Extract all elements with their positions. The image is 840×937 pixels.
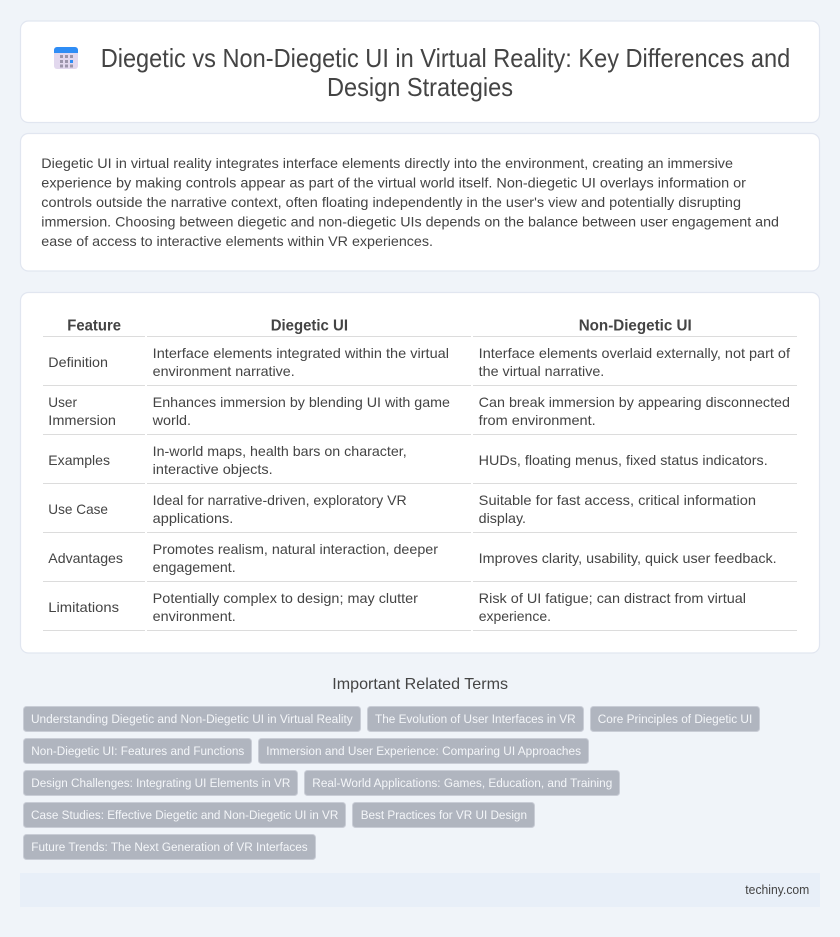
row: use case: display. — [479, 510, 526, 526]
row: examples: HUDs, floating menus, fixed status indicators. — [479, 452, 768, 468]
tag — [24, 802, 346, 828]
tag: Non-Diegetic UI: Features and Functions — [31, 744, 244, 758]
tag — [258, 738, 588, 764]
tag — [24, 738, 252, 764]
row: user immersion: world. — [152, 412, 191, 428]
row: user immersion: from environment. — [479, 412, 596, 428]
row: limitations — [48, 590, 746, 624]
tag: Understanding Diegetic and Non-Diegetic UI in Virtual Reality — [31, 712, 353, 726]
table header: Feature — [67, 318, 121, 335]
panel: introduction — [20, 134, 820, 271]
header panel — [20, 21, 820, 122]
row: definition: Interface elements overlaid externally, not part of — [479, 345, 790, 361]
tag: Immersion and User Experience: Comparing UI Approaches — [266, 744, 581, 758]
intro text block: experience by making controls appear as part of the virtual world itself. Non-diegetic UI overlays information or — [41, 174, 746, 190]
row: use case: Suitable for fast access, critical information — [479, 492, 756, 508]
title: Design Strategies — [327, 74, 513, 102]
title — [101, 45, 790, 102]
row: definition: Interface elements integrated within the virtual — [153, 345, 449, 361]
tag: The Evolution of User Interfaces in VR — [375, 712, 576, 726]
table header: Non-Diegetic UI — [579, 318, 692, 335]
row: use case: applications. — [153, 510, 233, 526]
row: limitations: Potentially complex to design; may clutter — [153, 590, 418, 606]
row: user immersion: Enhances immersion by blending UI with game — [153, 394, 450, 410]
footer site name: techiny.com — [745, 883, 809, 897]
row: limitations: experience. — [479, 608, 551, 624]
tag — [24, 706, 360, 732]
row: advantages: Promotes realism, natural interaction, deeper — [153, 541, 438, 557]
intro text block: Diegetic UI in virtual reality integrates interface elements directly into the environment, creating an immersive — [41, 155, 733, 171]
row: advantages: Improves clarity, usability, quick user feedback. — [479, 550, 777, 566]
row: use case: Ideal for narrative-driven, exploratory VR — [153, 492, 407, 508]
row: examples — [48, 443, 768, 477]
icon: calendar grid — [54, 47, 78, 69]
row: limitations: environment. — [153, 608, 236, 624]
row: limitations: Risk of UI fatigue; can distract from virtual — [479, 590, 746, 606]
tag: Best Practices for VR UI Design — [361, 808, 527, 822]
row: use case — [48, 492, 756, 526]
intro text block — [41, 155, 779, 249]
intro text block: immersion. Choosing between diegetic and non-diegetic UIs depends on the balance between user engagement and — [41, 214, 779, 230]
row: examples: In-world maps, health bars on character, — [153, 443, 407, 459]
tag — [368, 706, 584, 732]
row: advantages: Advantages — [48, 550, 123, 566]
row: user immersion: Can break immersion by appearing disconnected — [479, 394, 790, 410]
tag — [590, 706, 760, 732]
row: advantages — [48, 541, 777, 575]
tag: Design Challenges: Integrating UI Elements in VR — [31, 776, 290, 790]
row: limitations: Limitations — [48, 599, 119, 615]
row: use case: Use Case — [48, 501, 108, 517]
row: user immersion — [48, 394, 790, 428]
tag — [352, 802, 534, 828]
panel: comparison table — [20, 292, 820, 653]
row: definition: the virtual narrative. — [479, 363, 604, 379]
related term tags — [24, 706, 760, 860]
row: definition: Definition — [48, 354, 108, 370]
tag — [24, 834, 316, 860]
footer bar — [20, 873, 820, 907]
tag: Future Trends: The Next Generation of VR Interfaces — [31, 840, 308, 854]
row: user immersion: Immersion — [48, 412, 116, 428]
intro text block: ease of access to interactive elements within VR experiences. — [41, 233, 433, 249]
tag: Case Studies: Effective Diegetic and Non-Diegetic UI in VR — [31, 808, 338, 822]
row: user immersion: User — [48, 394, 77, 410]
row: examples: Examples — [48, 452, 110, 468]
table header: Diegetic UI — [271, 318, 348, 335]
row: advantages: engagement. — [153, 559, 236, 575]
row: definition — [48, 345, 790, 379]
row: definition: environment narrative. — [153, 363, 295, 379]
tag — [304, 770, 620, 796]
heading: related terms: Important Related Terms — [332, 676, 508, 693]
table header — [67, 318, 692, 335]
tag: Real-World Applications: Games, Education, and Training — [312, 776, 612, 790]
tag: Core Principles of Diegetic UI — [598, 712, 752, 726]
intro text block: controls outside the narrative context, often floating independently in the user's view and potentially disrupting — [41, 194, 741, 210]
tag — [24, 770, 298, 796]
row: examples: interactive objects. — [153, 461, 273, 477]
title: Diegetic vs Non-Diegetic UI in Virtual Reality: Key Differences and — [101, 45, 790, 73]
